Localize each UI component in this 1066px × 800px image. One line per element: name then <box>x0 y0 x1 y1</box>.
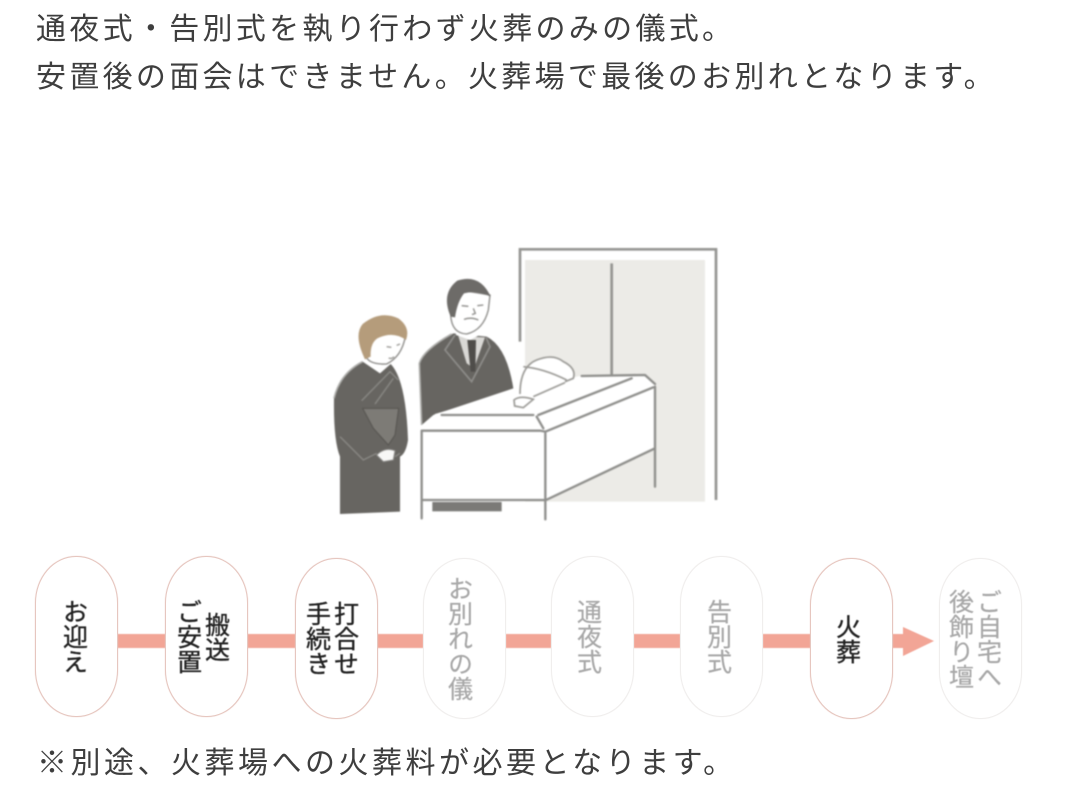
step: お別れの儀 (not included) <box>423 558 506 719</box>
step: 搬送ご安置: 搬送 <box>202 612 230 662</box>
man in a suit <box>419 279 513 425</box>
intro line 1: 通夜式・告別式を執り行わず火葬のみの儀式。 <box>36 13 735 46</box>
step: 打合せ手続き: 手続き <box>302 601 330 676</box>
footnote: ※別途、火葬場への火葬料が必要となります。 <box>37 747 737 780</box>
flow chart <box>34 556 1022 720</box>
step: 打合せ手続き <box>295 558 378 719</box>
cremator door <box>520 249 716 502</box>
coffin <box>422 375 655 519</box>
step: 搬送ご安置 <box>165 556 248 717</box>
step: ご自宅へ後飾り壇 (not included): ご自宅へ <box>974 588 1002 688</box>
step: 通夜式 (not included): 通夜式 <box>574 599 602 674</box>
intro line 2: 安置後の面会はできません。火葬場で最後のお別れとなります。 <box>36 61 997 94</box>
step: 打合せ手続き: 打合せ <box>330 601 358 676</box>
intro text <box>36 13 997 94</box>
step: お迎え: お迎え <box>60 599 88 674</box>
step: 通夜式 (not included) <box>551 556 634 717</box>
step: お迎え <box>35 556 118 717</box>
step: 搬送ご安置: ご安置 <box>174 599 202 674</box>
step: ご自宅へ後飾り壇 (not included) <box>939 558 1022 719</box>
connector bar and arrow <box>118 626 934 656</box>
step: ご自宅へ後飾り壇 (not included): 後飾り壇 <box>946 588 974 688</box>
step: 告別式 (not included): 告別式 <box>704 599 732 674</box>
step: 火葬: 火葬 <box>832 614 860 664</box>
step: 火葬 <box>810 558 893 719</box>
step: 告別式 (not included) <box>680 556 763 717</box>
step: お別れの儀 (not included): お別れの儀 <box>444 576 472 701</box>
white burial cloth on the coffin <box>513 357 574 408</box>
woman in a kimono <box>334 315 408 514</box>
